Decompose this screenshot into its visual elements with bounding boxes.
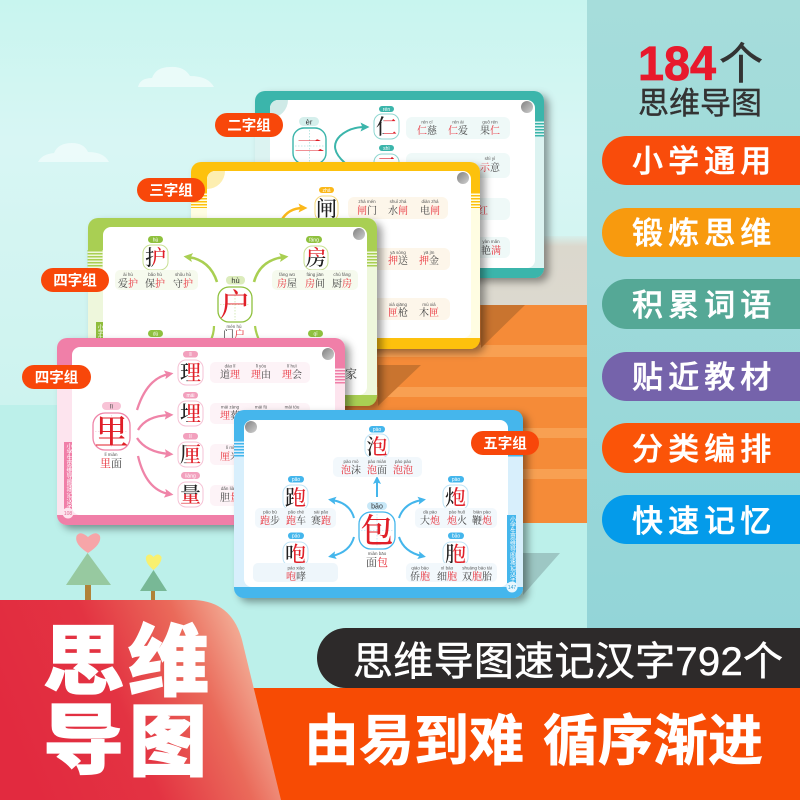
word row: 闸门 水闸 电闸: 水闸 [388,204,408,217]
side label: 小学生思维导图速记汉字 [508,515,516,582]
character box: 厘: 厘 [180,443,201,467]
word row: 爱护 保护 守护: shǒu hù [175,272,192,277]
word row: 示意: shì yì [485,156,495,161]
word row: 匣枪 木匣: xiá qiāng [389,302,408,307]
word row: 匣枪 木匣: 木匣 [419,306,439,319]
word row: 仁慈 仁爱 果仁: rén ài [452,120,464,124]
side label [507,515,516,583]
pinyin: mai [183,392,198,399]
character box: 里: 里 [94,415,128,452]
title: 184 mind maps: 思维导图 [638,86,762,121]
character box: 仁: 仁 [376,115,397,139]
page number [506,582,518,592]
character box: 炮: 炮 [445,486,466,510]
title: 思维导图: 维 [128,618,209,706]
word: 门户: mén hù [226,324,242,329]
word row: 咆哮: páo xiào [287,566,305,570]
character box: 二: 二 [294,138,325,156]
title: 思维导图: 思 [43,619,124,704]
word row: 闸门 水闸 电闸: diàn zhá [421,199,439,204]
character box: 理: 理 [180,361,201,385]
word row: 埋葬: 埋葬 [220,409,240,422]
pinyin: li center: lǐ [110,404,113,410]
word row: 大炮 炮火 鞭炮: pào huǒ [449,510,466,514]
feature pill: 快速记忆 [602,495,800,544]
word row: 道理 理由 理会: dào lǐ [225,364,236,368]
pinyin: du: dù [153,332,158,338]
pinyin: du [148,330,163,338]
pinyin: li center [102,402,121,410]
word row: 闸门 水闸 电闸: 电闸 [420,204,440,217]
word row: 泡沫 泡面 泡泡: pào miàn [368,459,387,464]
side label: 小学生思维 [96,323,103,353]
word row: 示意: 示意 [480,162,500,174]
word row: 艳满: yàn mǎn [482,239,500,244]
word: 里面: 里面 [100,457,122,470]
word row: 泡沫 泡面 泡泡: 泡面 [367,464,387,476]
word: 门户: 门户 [223,327,245,341]
word row: 大炮 炮火 鞭炮: 大炮 [420,514,440,527]
icon: tree with yellow heart [140,554,167,602]
word: 里面 [100,452,122,470]
label: 五字组 [471,431,539,455]
word: 面包 [366,551,388,569]
word row: 埋葬: mái zàng [221,404,240,410]
word row: 侨胞 细胞 双胞胎: xì bāo [441,566,454,570]
feature pill: 锻炼思维: 锻炼思维 [632,216,776,251]
character box: 户: 户 [220,288,250,323]
feature pill: 贴近教材: 贴近教材 [632,360,776,395]
character box: 闸: 闸 [316,197,337,221]
word row: 房屋 房间 厨房: 厨房 [332,277,352,290]
page number: 147 [508,585,516,591]
word row: 大炮 炮火 鞭炮: 炮火 [447,514,467,527]
word row: 仁慈 仁爱 果仁: guǒ rén [482,120,498,124]
word row: 大炮 炮火 鞭炮: biān pào [473,510,491,514]
right panel background [587,0,800,628]
word row: 押送 押金: 押金 [419,254,439,267]
pinyin: pao lower left [288,532,304,540]
word row: 爱护 保护 守护: 守护 [173,277,193,290]
label: 二字组: 二字组 [227,116,271,134]
pinyin: liang [181,472,200,480]
word row: 仁慈 仁爱 果仁 [406,117,510,139]
word row: 泡沫 泡面 泡泡: 泡沫 [341,464,361,476]
character box: 示: 示 [376,155,398,179]
cloud: upper [138,67,214,87]
word row: 匣枪 木匣 [348,298,450,320]
pinyin: mai: mái [186,393,195,399]
feature pill: 小学通用 [602,136,800,185]
pinyin: qi: qǐ [314,332,318,338]
pinyin: fang: fáng [309,238,319,244]
icon: tree with pink heart [66,533,111,602]
pinyin: hu top: hù [153,238,158,244]
dark banner: 792 characters [317,628,800,688]
word row: 跑步 跑车 赛跑: 赛跑 [311,514,331,527]
word row: 埋葬: mái fú [255,404,268,410]
word row: 胆量: dǎn liàng [221,486,240,491]
character box: 埋: 埋 [180,402,201,426]
title: 184 mind maps: 个 [719,40,763,89]
character box: 跑: 跑 [285,486,306,510]
pinyin: li centimeter [183,433,198,440]
word row: 道理 理由 理会 [210,362,310,383]
character box: 胞: 胞 [445,542,466,566]
word row: 爱护 保护 守护: ài hù [123,272,133,277]
word row: 示意 [406,153,510,178]
feature pill: 快速记忆: 快速记忆 [632,504,776,539]
title: 思维导图: 图 [129,698,207,786]
pinyin: shi [379,145,394,152]
pinyin: er: èr [306,118,313,126]
word: 面包: miàn bāo [368,551,387,556]
word row: 埋葬: mái tóu [285,404,300,410]
pinyin: bao lower right: bāo [452,534,460,540]
pinyin: ren [379,106,394,113]
character box: 房: 房 [306,246,326,270]
arrows: fan to four characters [137,374,169,494]
character box: 包: 包 [360,513,394,550]
card: three-character group (yellow) [191,162,480,349]
pinyin: zha [319,187,334,194]
pinyin: shi: shì [383,146,390,152]
feature pill: 积累词语: 积累词语 [632,288,776,323]
word row: 跑步 跑车 赛跑: pǎo chē [288,510,305,514]
pinyin: pao left: pǎo [292,477,300,483]
slogan: 由易到难 循序渐进: 循序渐进 [543,710,763,772]
word row: 泡沫 泡面 泡泡: pào mò [343,459,359,464]
arrow: to 闸 [281,208,303,221]
feature pill: 积累词语 [602,279,800,329]
word row: 闸门 水闸 电闸: zhá mén [358,199,376,204]
pinyin: li centimeter: lí [189,434,192,440]
title: 184 mind maps: 184 [638,38,716,91]
word row: 道理 理由 理会: 道理 [220,368,240,381]
arrow: lower left [210,326,214,342]
pinyin: pao lower left: páo [292,534,300,540]
feature pill: 分类编排: 分类编排 [632,432,776,467]
word row: 侨胞 细胞 双胞胎: 双胞胎 [462,571,493,583]
word row: 侨胞 细胞 双胞胎: 细胞 [437,571,457,583]
pinyin: hu center: hù [231,276,240,285]
word row: 咆哮 [253,563,338,583]
word row: 厘米: lí mǐ [226,445,235,450]
word row: 艳满: 艳满 [481,244,501,257]
word row: 大炮 炮火 鞭炮: dà pào [423,510,437,514]
word row: 埋葬 [210,403,310,424]
feature pill: 小学通用: 小学通用 [632,144,776,179]
title: 思维导图: 导 [43,699,124,783]
partial word: 家 [345,366,357,381]
word row: 大炮 炮火 鞭炮 [415,508,497,528]
word row: 仁慈 仁爱 果仁: 仁爱 [448,124,468,137]
word row: 跑步 跑车 赛跑: 跑车 [286,514,306,527]
slogan: 由易到难 循序渐进: 由易到难 [304,710,524,772]
label: 四字组 green card: 四字组 [53,272,97,290]
word row: 侨胞 细胞 双胞胎 [406,563,497,583]
word row: 侨胞 细胞 双胞胎: qiáo bāo [411,566,429,570]
word row: 房屋 房间 厨房: chú fáng [333,272,351,277]
bottom orange band [0,688,800,800]
word row: 匣枪 木匣: 匣枪 [388,306,408,319]
cloud: lower [38,143,109,162]
word row: 道理 理由 理会: 理会 [282,368,302,381]
pinyin: pao top [369,426,385,433]
pinyin: er [299,117,319,126]
label: 四字组 green card [41,268,109,292]
pinyin: pao left [288,476,304,483]
pinyin: pao right [448,476,464,483]
side label: 小学生思维导图速记汉字 [65,442,72,509]
word row: 押送 押金: 押送 [388,254,408,267]
label: 二字组 [215,113,283,137]
word row: 房屋 房间 厨房 [272,270,358,290]
word row: 道理 理由 理会: lǐ yóu [256,364,267,368]
word row: 胆量: 胆量 [220,492,240,504]
word row: 爱护 保护 守护: 爱护 [118,277,138,290]
word row: 闸门 水闸 电闸: shuǐ zhá [390,199,407,204]
arrow: to 房 [254,257,284,282]
word: 里面: lǐ miàn [104,452,118,457]
word row: third: 红红 [468,205,488,217]
word row: 房屋 房间 厨房: fáng jiān [306,272,324,277]
pinyin: hu center [226,276,245,285]
word row: 仁慈 仁爱 果仁: 果仁 [480,124,500,137]
word row: 咆哮: 咆哮 [286,570,306,583]
word row: 跑步 跑车 赛跑: sài pǎo [314,510,329,514]
word row: 泡沫 泡面 泡泡 [333,457,422,477]
title: 思维导图 [43,618,209,786]
word row: 爱护 保护 守护: 保护 [145,277,165,290]
word row: 泡沫 泡面 泡泡: pào pào [395,459,412,464]
word row: 闸门 水闸 电闸 [348,197,448,219]
word row: 闸门 水闸 电闸: 闸门 [357,204,377,217]
card: two-character group (teal) [255,91,544,278]
character box: 量: 量 [180,483,201,507]
pinyin: bao [367,502,387,510]
feature pill: 锻炼思维 [602,208,800,257]
pinyin: pao right: pào [452,477,460,483]
card: four-character group (pink) [57,338,345,525]
word row: 厘米: 厘米 [220,450,240,463]
red title panel [0,600,281,800]
card: four-character group (green) [88,218,377,406]
word row: 跑步 跑车 赛跑 [255,508,336,528]
word row: 艳满 [406,237,510,258]
character box: 二 [293,128,326,164]
title: 184 mind maps [638,38,763,121]
pinyin: li [183,351,198,358]
word row: 厘米 [210,444,310,465]
word row: 仁慈 仁爱 果仁: 仁慈 [417,124,437,137]
word row: 胆量 [210,485,310,506]
label: 五字组: 五字组 [483,434,527,452]
dark banner: 792 characters: 思维导图速记汉字792个 [353,640,783,684]
arrow: lower right [255,326,260,342]
pinyin: zha: zhá [322,188,331,194]
word row: 押送 押金 [348,248,450,270]
word row: 房屋 房间 厨房: fáng wū [279,272,295,277]
pinyin: li: lǐ [189,352,192,358]
pinyin: ren: rén [383,107,390,113]
label: 三字组: 三字组 [149,182,193,200]
word row: 侨胞 细胞 双胞胎: shuāng bāo tāi [462,566,492,570]
word row: 跑步 跑车 赛跑: 跑步 [260,514,280,527]
card: five-character group (blue) [234,410,523,598]
label: 四字组 pink card: 四字组 [35,368,79,386]
pinyin: pao top: pào [373,427,381,433]
word row: 爱护 保护 守护 [115,270,198,290]
word row: 匣枪 木匣: mù xiá [422,302,436,307]
arrow: to 仁 [335,127,365,163]
page number: 108 [64,511,72,517]
word row: 房屋 房间 厨房: 房屋 [277,277,297,290]
word row: 跑步 跑车 赛跑: pǎo bù [263,510,277,514]
word row: 押送 押金: yā jīn [424,250,435,255]
feature pill: 贴近教材 [602,352,800,401]
label: 三字组 [137,178,205,202]
word row: 大炮 炮火 鞭炮: 鞭炮 [472,514,492,527]
word row: 押送 押金: yā sòng [390,250,406,255]
word row: 仁慈 仁爱 果仁: rén cí [421,120,433,124]
pinyin: hu top [148,236,163,244]
word row: 泡沫 泡面 泡泡: 泡泡 [393,464,413,476]
word row: 道理 理由 理会: 理由 [251,368,271,381]
pinyin: bao: bāo [371,504,383,510]
page number [62,508,74,518]
word row: 道理 理由 理会: lǐ huì [287,364,297,368]
word row: third [406,198,510,220]
label: 四字组 pink card [22,365,91,389]
pinyin: liang: liàng [185,474,196,480]
feature pill: 分类编排 [602,423,800,473]
arrows: radial from 包 [332,480,422,556]
pinyin: qi [308,330,323,338]
character box: 咆: 咆 [285,542,306,566]
word row: 爱护 保护 守护: bǎo hù [148,272,162,277]
word: 面包: 面包 [366,555,388,569]
word row: 房屋 房间 厨房: 房间 [305,277,325,290]
arrow: to 护 [188,257,217,282]
character box: 泡: 泡 [366,435,388,459]
character box: 护: 护 [145,246,166,270]
pinyin: bao lower right [448,532,464,540]
word row: 侨胞 细胞 双胞胎: 侨胞 [410,570,430,583]
pinyin: fang [306,236,322,244]
